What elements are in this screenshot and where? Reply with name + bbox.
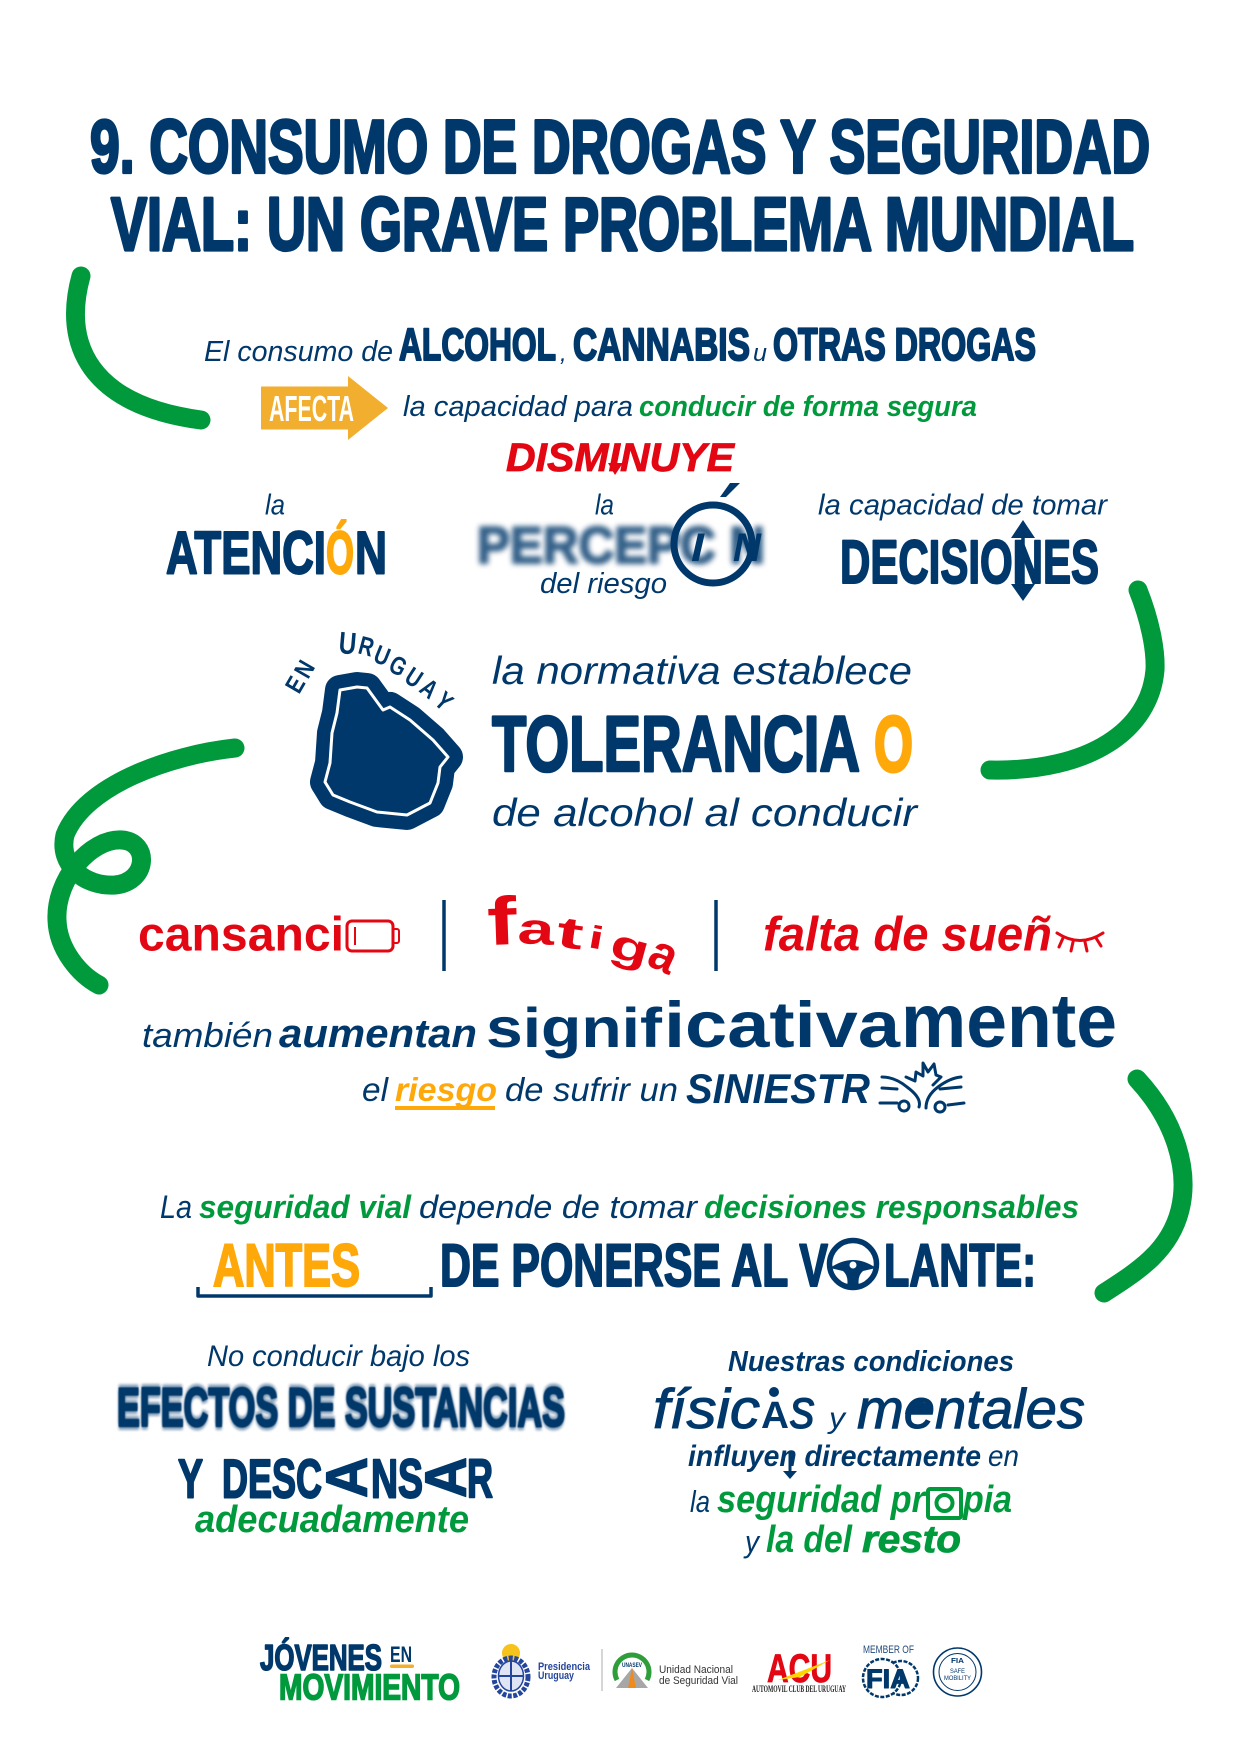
right block: condiciones: s <box>790 1377 815 1440</box>
arrow: afecta: AFECTA <box>269 388 354 429</box>
logo: safe mobility: FIA <box>951 1658 964 1665</box>
item: percepcion: I <box>691 526 705 570</box>
intro line: substances <box>204 319 1036 370</box>
map: en Uruguay: R <box>356 630 377 662</box>
intro line: substances: , <box>560 340 567 367</box>
risk factor: fatiga: t <box>554 907 587 959</box>
right block: condiciones: influyen directamente <box>688 1440 981 1473</box>
map: en Uruguay: A <box>415 673 444 704</box>
risk factor: fatiga <box>486 883 688 986</box>
left block: no conducir: DESC <box>222 1448 322 1510</box>
logo: presidencia uruguay <box>494 1644 591 1696</box>
map: en Uruguay: E <box>279 671 311 698</box>
text: significativamente: mente <box>901 979 1117 1064</box>
logo: fia member <box>863 1644 918 1697</box>
map: en Uruguay: G <box>384 649 412 682</box>
item: decisiones: DECISIONES <box>840 528 1099 596</box>
logo: safe mobility: MOBILITY <box>944 1675 972 1682</box>
text: significativamente: signif <box>486 996 662 1059</box>
item: decisiones: la capacidad de tomar <box>818 490 1108 522</box>
text: significativamente <box>142 979 1117 1064</box>
heading: disminuye: DISMINUYE <box>506 436 735 480</box>
text: seguridad vial: decisiones responsables <box>704 1189 1079 1225</box>
intro line: substances: El consumo de <box>204 336 393 368</box>
item: atencion: Ó <box>326 520 354 586</box>
left block: no conducir: NS <box>371 1448 423 1510</box>
logo: unasev <box>615 1655 738 1688</box>
map: en Uruguay: Y <box>429 686 459 717</box>
text: seguridad vial: seguridad vial <box>199 1189 412 1225</box>
text: riesgo de siniestro: SINIESTR <box>686 1065 871 1112</box>
left block: no conducir: Y <box>178 1448 203 1510</box>
text: capacity to drive <box>403 391 977 423</box>
left block: no conducir <box>117 1340 565 1541</box>
green curve: lower right <box>1104 1079 1183 1293</box>
text: seguridad vial <box>160 1189 1079 1225</box>
risk factor: cansancio: cansanci <box>138 908 344 962</box>
map: en Uruguay: U <box>400 661 428 694</box>
risk factor: fatiga: a <box>640 924 688 986</box>
left block: no conducir: adecuadamente <box>195 1499 469 1541</box>
right block: condiciones: y <box>827 1402 847 1435</box>
left block: no conducir: R <box>467 1448 493 1510</box>
right block: condiciones: seguridad pr <box>717 1479 927 1521</box>
text: tolerancia cero <box>492 650 919 835</box>
map: en Uruguay: U <box>370 639 394 672</box>
text: riesgo de siniestro: de sufrir un <box>505 1071 678 1108</box>
risk factor: fatiga: f <box>486 883 519 960</box>
item: percepcion <box>477 483 765 600</box>
logo: unasev: Unidad Nacional <box>659 1664 733 1676</box>
intro line: substances: u <box>753 340 767 367</box>
text: tolerancia cero: O <box>874 699 913 788</box>
title <box>90 104 1150 266</box>
right block: condiciones: pia <box>962 1479 1012 1521</box>
item: percepcion: del riesgo <box>540 568 667 600</box>
heading: antes de ponerse al volante <box>198 1232 1036 1299</box>
left block: no conducir: A <box>414 1457 479 1498</box>
right block: condiciones: A <box>761 1395 789 1437</box>
icon: crash <box>880 1063 964 1112</box>
map: en Uruguay: U <box>337 625 358 661</box>
item: percepcion: N <box>733 526 762 570</box>
right block: condiciones: la <box>690 1484 710 1519</box>
text: tolerancia cero: TOLERANCIA <box>492 699 860 788</box>
logo: fia member: FIA <box>866 1664 910 1694</box>
map: en Uruguay: N <box>288 655 320 683</box>
text: tolerancia cero: la normativa establece <box>492 650 912 693</box>
green curve: left loop <box>57 748 235 985</box>
divider <box>714 900 718 971</box>
right block: condiciones: físic <box>653 1377 760 1440</box>
right block: condiciones: Nuestras condiciones <box>728 1346 1014 1378</box>
risk factor: fatiga: a <box>517 903 557 954</box>
text: riesgo de siniestro: riesgo <box>395 1071 497 1108</box>
left block: no conducir: A <box>315 1457 380 1498</box>
risk factor: fatiga: i <box>586 919 607 957</box>
text: capacity to drive: la capacidad para <box>403 391 633 423</box>
intro line: substances: ALCOHOL <box>399 319 556 370</box>
logo: presidencia uruguay: Uruguay <box>538 1670 575 1682</box>
arrow: afecta <box>261 376 388 440</box>
text: riesgo de siniestro <box>362 1065 871 1112</box>
text: seguridad vial: La <box>160 1189 192 1225</box>
item: decisiones <box>818 490 1108 601</box>
green curve: right of decisiones <box>990 590 1155 770</box>
logo: safe mobility: SAFE <box>950 1668 966 1675</box>
logo: unasev: UNASEV <box>622 1663 642 1669</box>
item: atencion <box>166 490 387 586</box>
text: significativamente: también <box>142 1017 273 1055</box>
right block: condiciones: en <box>988 1440 1019 1473</box>
logo: presidencia uruguay: Presidencia <box>538 1661 591 1673</box>
map: en Uruguay <box>279 625 459 815</box>
divider <box>601 1649 603 1691</box>
text: capacity to drive: conducir de forma segura <box>639 391 977 423</box>
risk factor: fatiga: g <box>606 920 655 975</box>
logo: jovenes en movimiento: MOVIMIENTO <box>279 1666 460 1708</box>
text: riesgo de siniestro: el <box>362 1071 390 1108</box>
right block: condiciones: resto <box>862 1519 961 1561</box>
item: percepcion: la <box>595 490 614 522</box>
left block: no conducir: EFECTOS DE SUSTANCIAS <box>117 1373 565 1435</box>
risk factor: falta de sueno: falta de sueñ <box>763 908 1052 962</box>
item: percepcion: PERCEPC N <box>477 517 765 575</box>
logo: jovenes en movimiento: EN <box>390 1642 412 1667</box>
heading: antes de ponerse al volante: ANTES <box>213 1232 360 1299</box>
left block: no conducir: EFECTOS DE SUSTANCIAS <box>117 1379 565 1441</box>
text: significativamente: icativa <box>664 988 901 1061</box>
right block: condiciones: la del <box>766 1519 853 1561</box>
item: atencion: la <box>265 490 285 522</box>
heading: antes de ponerse al volante: DE PONERSE AL V <box>440 1232 828 1299</box>
item: atencion: N <box>355 520 387 586</box>
heading: antes de ponerse al volante: LANTE: <box>884 1232 1036 1299</box>
logo: automovil club: AUTOMOVIL CLUB DEL URUGUAY <box>752 1684 846 1694</box>
right block: condiciones: y <box>743 1524 761 1559</box>
divider <box>442 900 446 971</box>
text: seguridad vial: depende de tomar <box>419 1189 698 1225</box>
logo: unasev: de Seguridad Vial <box>659 1675 738 1687</box>
intro line: substances: OTRAS DROGAS <box>773 319 1036 370</box>
logo: jovenes en movimiento <box>260 1636 460 1708</box>
logo: automovil club: ACU <box>767 1647 832 1691</box>
right block: condiciones <box>653 1346 1085 1561</box>
green curve: top left <box>76 276 201 420</box>
item: atencion: ATENCI <box>166 520 326 586</box>
right block: condiciones: mentales <box>857 1377 1085 1440</box>
intro line: substances: CANNABIS <box>573 319 750 370</box>
text: significativamente: aumentan <box>279 1012 477 1056</box>
logo: safe mobility <box>934 1648 982 1696</box>
logo: fia member: MEMBER OF <box>863 1644 914 1656</box>
logo: jovenes en movimiento: JÓVENES <box>260 1636 382 1678</box>
left block: no conducir: EFECTOS DE SUSTANCIAS <box>117 1376 565 1438</box>
text: tolerancia cero: de alcohol al conducir <box>492 792 919 835</box>
left block: no conducir: No conducir bajo los <box>207 1340 470 1373</box>
